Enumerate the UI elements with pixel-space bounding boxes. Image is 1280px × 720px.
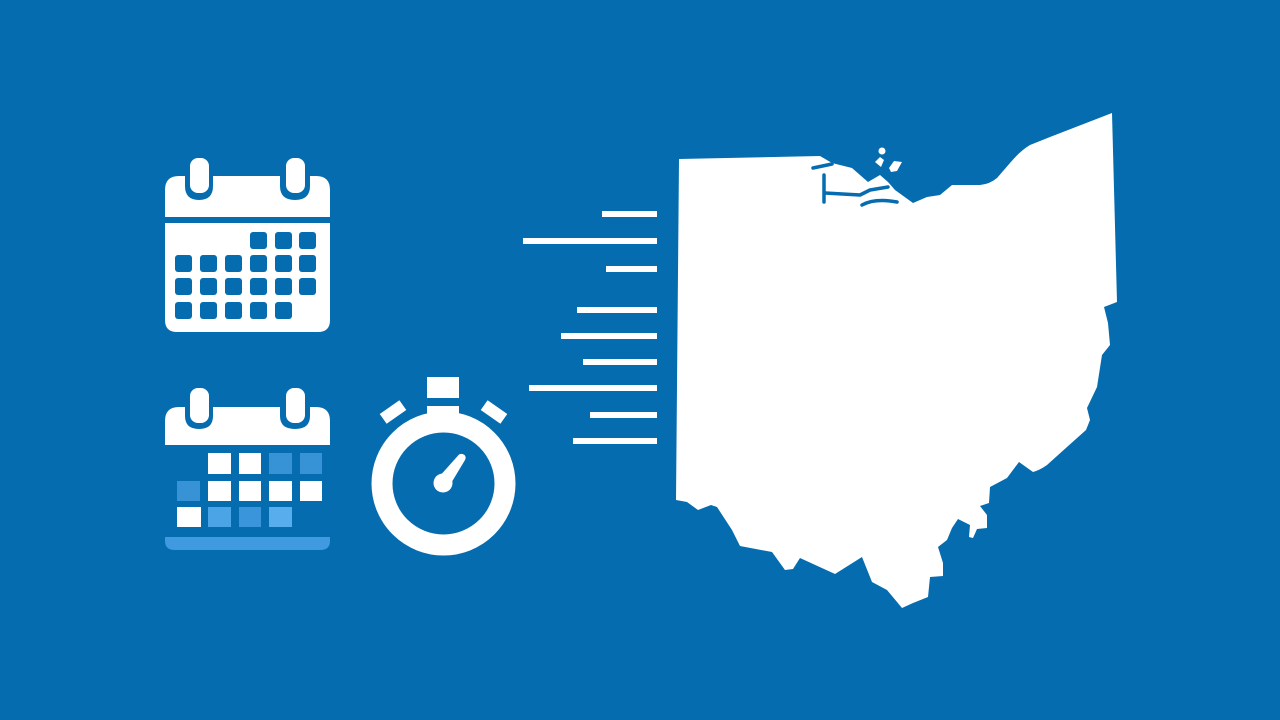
map: Ohio silhouette <box>676 113 1117 608</box>
icon: stopwatch <box>380 377 507 545</box>
icon: full calendar <box>165 158 330 332</box>
icon: Lake Erie shore detail <box>813 148 902 205</box>
icon: calendar with animated squares <box>165 388 330 550</box>
speed lines <box>523 211 657 444</box>
